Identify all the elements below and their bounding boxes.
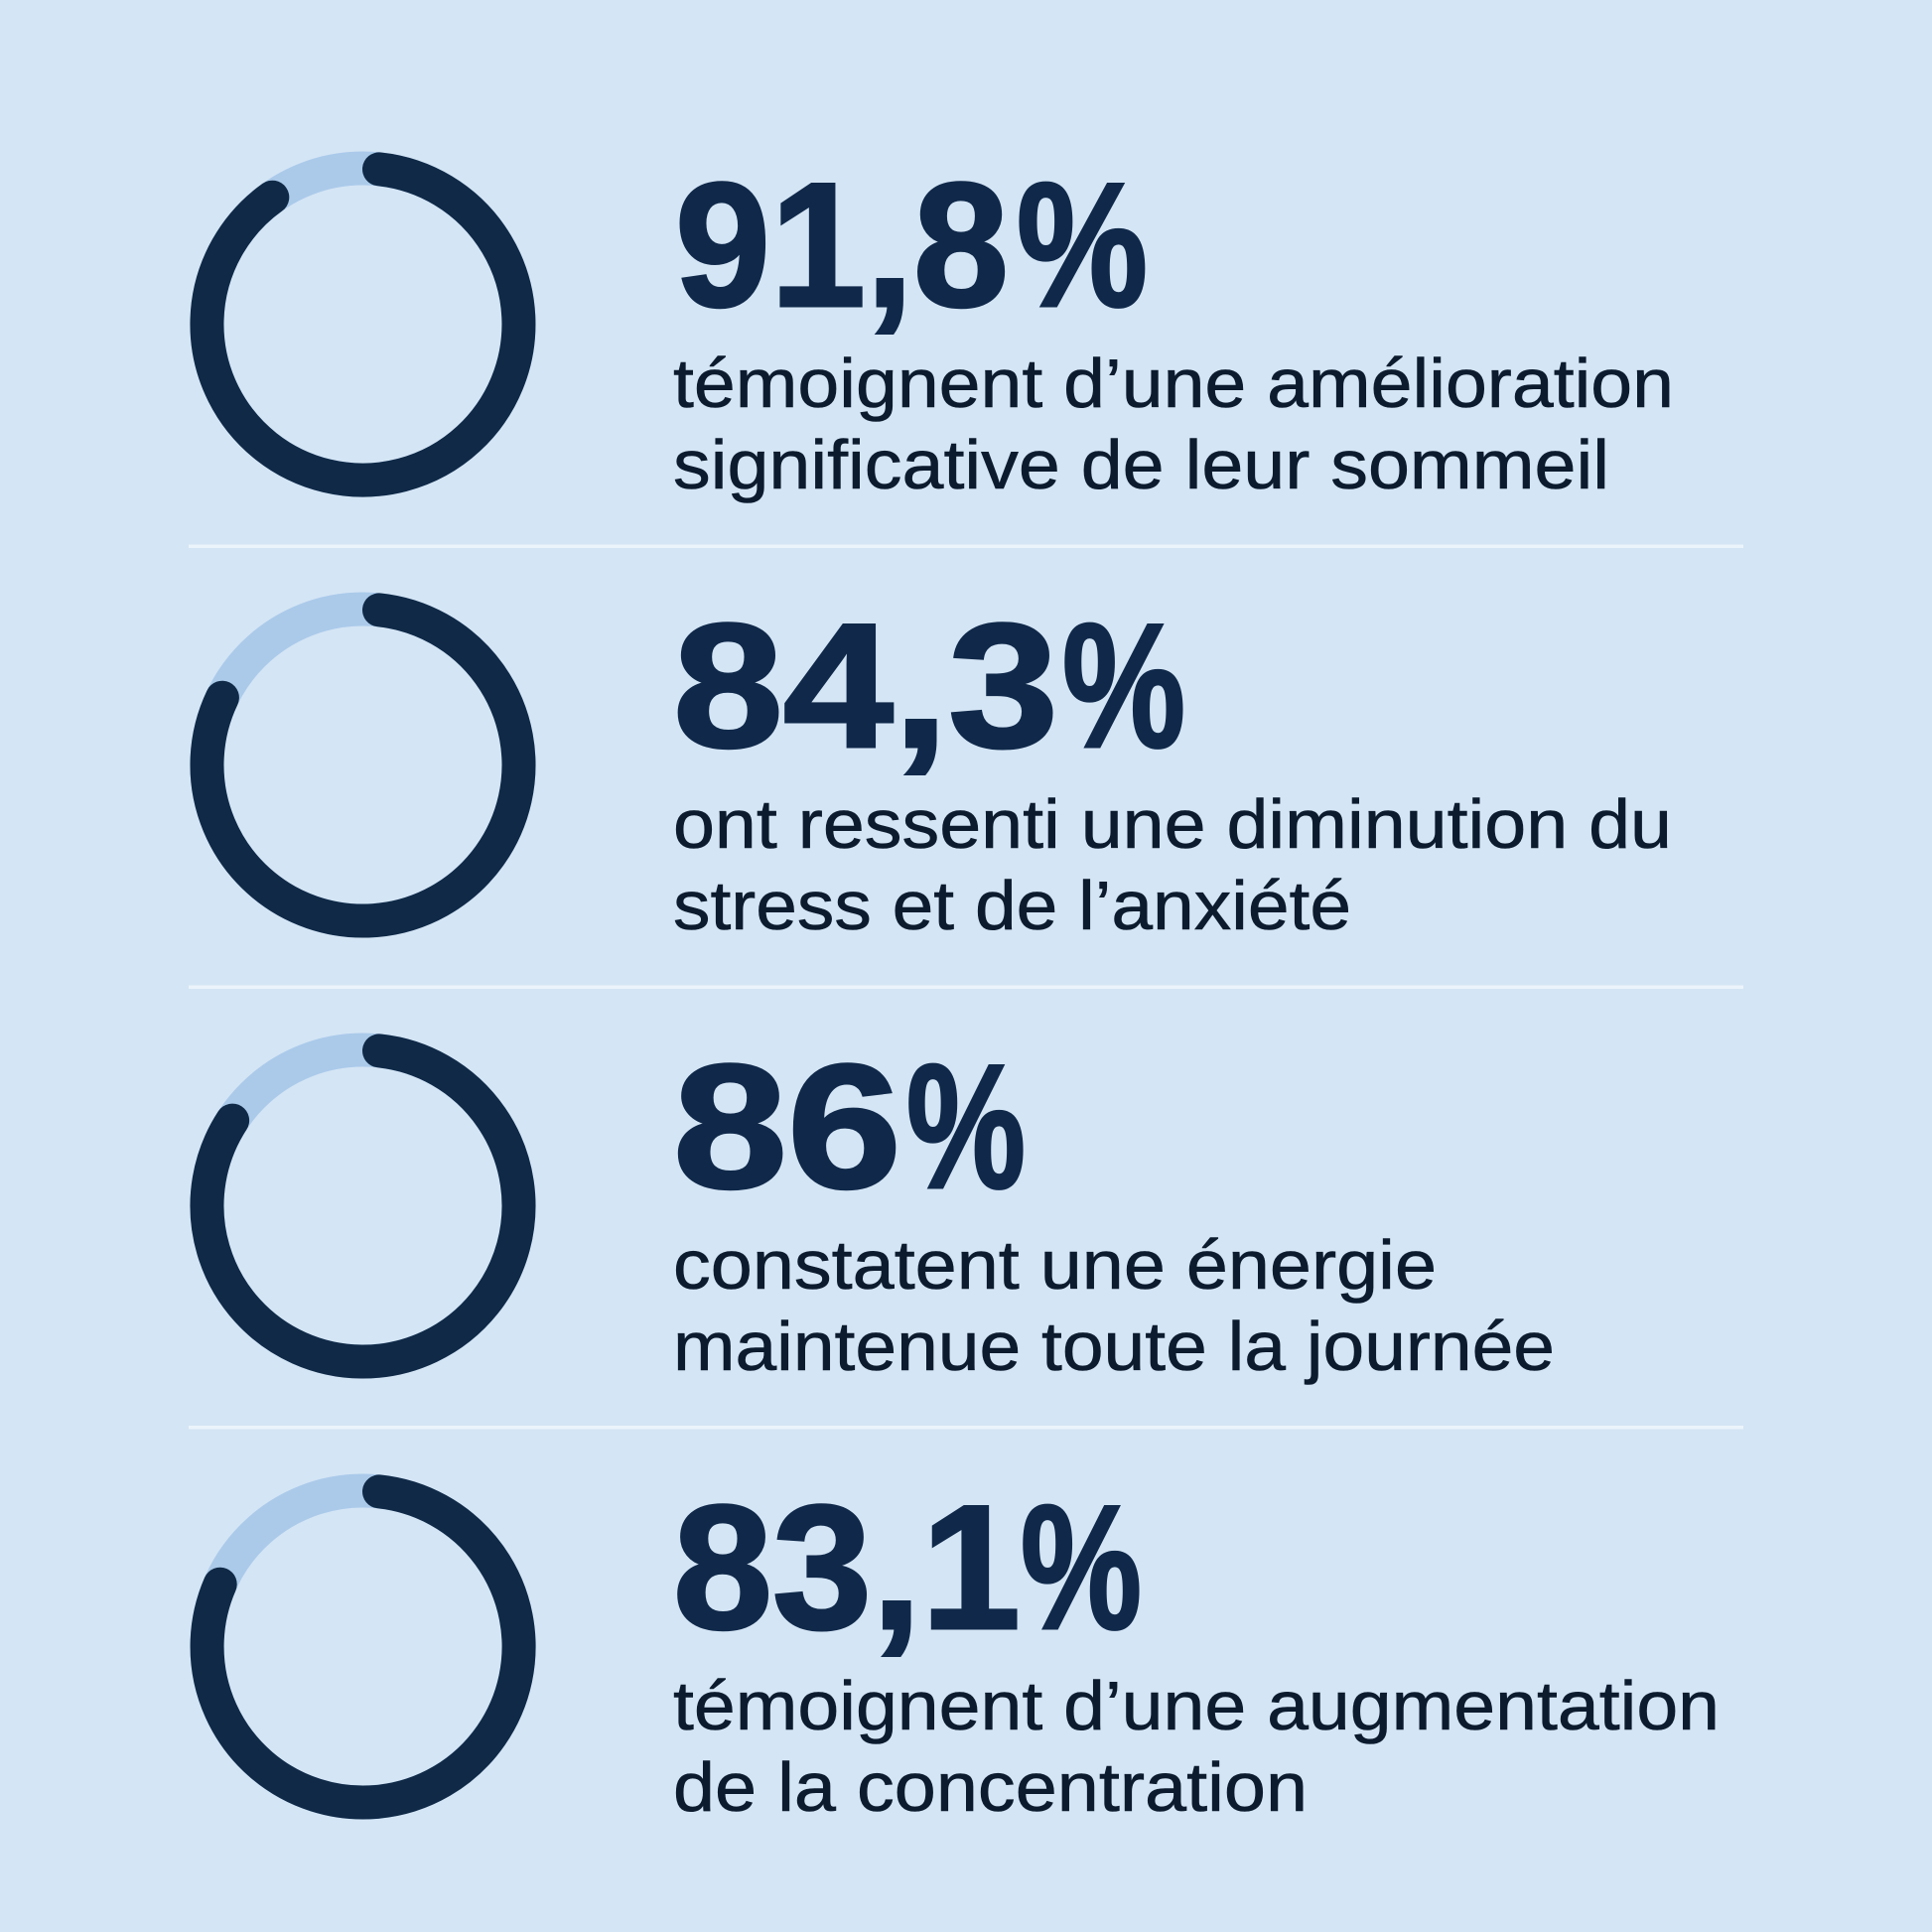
description: energy [673,1226,1555,1385]
statistic: 83,1%: % [1021,1468,1142,1666]
donut chart: 86% [207,1050,518,1362]
description: sleep: témoignent d’une amélioration [673,345,1674,422]
description: stress [673,785,1672,944]
row 2: stress reduction [207,587,1672,944]
row 3: energy [207,1028,1555,1385]
row 4: concentration [207,1468,1720,1826]
statistic: 91,8%: % [1017,146,1148,344]
description: sleep: significative de leur sommeil [673,426,1609,503]
description: energy: constatent une énergie [673,1226,1437,1304]
statistic: 84,3%: % [1062,587,1185,784]
description: stress: stress et de l’anxiété [673,867,1351,944]
statistic: 84,3%: 84,3 [673,587,1058,784]
description: sleep [673,345,1674,503]
statistic: 83,1%: 83,1 [673,1468,1021,1666]
donut chart: 84,3% [207,610,518,921]
statistic: 86%: % [906,1028,1026,1225]
statistic: 86%: 86 [673,1028,901,1225]
description: concentration [673,1667,1720,1826]
donut chart: 83,1% [207,1491,519,1803]
description: concentration: témoignent d’une augmentation [673,1667,1720,1744]
donut chart: 91,8% [207,169,518,481]
description: concentration: de la concentration [673,1748,1308,1826]
statistic: 91,8%: 91,8 [675,146,1009,344]
description: energy: maintenue toute la journée [673,1308,1555,1385]
description: stress: ont ressenti une diminution du [673,785,1672,863]
row 1: sleep improvement [207,146,1674,503]
